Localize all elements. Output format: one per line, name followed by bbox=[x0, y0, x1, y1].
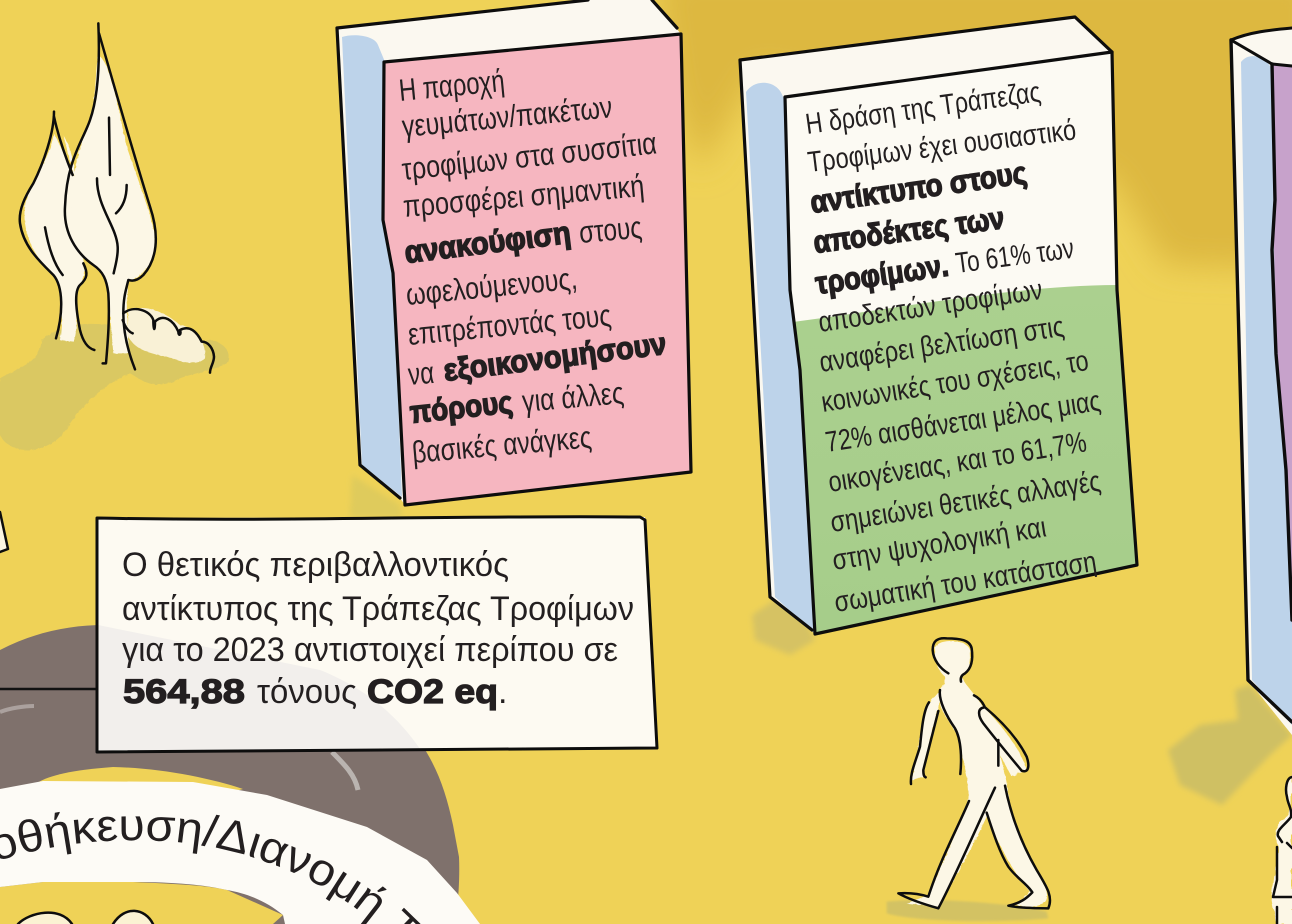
text: impact on recipients bbox=[804, 76, 1103, 619]
illustration: walking person bbox=[887, 638, 1050, 921]
text: impact on recipients: κοινωνικές του σχέσεις, το bbox=[819, 345, 1091, 419]
callout text: . bbox=[498, 673, 507, 711]
text: relief for beneficiaries: στους bbox=[578, 210, 643, 250]
text: impact on recipients: οικογένειας, και το 61,7% bbox=[826, 426, 1089, 499]
text: relief for beneficiaries: βασικές ανάγκες bbox=[411, 419, 593, 470]
icon tops below ring bbox=[18, 911, 153, 924]
text: relief for beneficiaries: ανακούφιση bbox=[403, 215, 573, 270]
text: relief for beneficiaries: γευμάτων/πακέτων bbox=[400, 89, 614, 144]
text: relief for beneficiaries: επιτρέποντάς τους bbox=[406, 298, 613, 352]
callout text: τόνους bbox=[257, 673, 357, 711]
panel: book with purple cover, cropped at right edge bbox=[1168, 28, 1292, 805]
text: impact on recipients: αποδεκτών τροφίμων bbox=[816, 274, 1045, 339]
text: impact on recipients: Τροφίμων έχει ουσιαστικό bbox=[806, 114, 1078, 179]
panel: book with pink cover, relief for beneficiaries bbox=[337, 0, 691, 517]
text: relief for beneficiaries: να bbox=[407, 355, 436, 392]
text: relief for beneficiaries bbox=[397, 63, 668, 470]
text: relief for beneficiaries: πόρους bbox=[408, 384, 514, 430]
text: relief for beneficiaries: τροφίμων στα συσσίτια bbox=[400, 125, 658, 187]
illustration: partial shape at left edge bbox=[0, 512, 8, 552]
callout text: Ο θετικός περιβαλλοντικός bbox=[122, 546, 509, 584]
text: relief for beneficiaries: ωφελούμενους, bbox=[404, 261, 579, 312]
text: impact on recipients: Το 61% των bbox=[954, 233, 1076, 280]
text: impact on recipients: Η δράση της Τράπεζας bbox=[804, 76, 1043, 141]
text: impact on recipients: στην ψυχολογική και bbox=[830, 512, 1048, 577]
callout text: 564,88 bbox=[123, 673, 245, 711]
callout text: CO2 eq bbox=[367, 673, 498, 711]
text: impact on recipients: σωματική του κατάσταση bbox=[832, 546, 1099, 619]
callout text bbox=[122, 546, 634, 711]
text: relief for beneficiaries: Η παροχή bbox=[397, 63, 506, 108]
text: relief for beneficiaries: προσφέρει σημαντική bbox=[402, 168, 646, 224]
callout text: αντίκτυπος της Τράπεζας Τροφίμων bbox=[122, 590, 634, 628]
text: impact on recipients: τροφίμων. bbox=[813, 248, 951, 301]
text: impact on recipients: αντίκτυπο στους bbox=[808, 155, 1029, 220]
text: impact on recipients: αποδέκτες των bbox=[811, 200, 1006, 260]
text: impact on recipients: αναφέρει βελτίωση στις bbox=[817, 311, 1066, 379]
text: relief for beneficiaries: εξοικονομήσουν bbox=[442, 326, 668, 388]
illustration: grey circle with ring label bbox=[0, 625, 480, 924]
ring band bbox=[0, 781, 480, 924]
text: relief for beneficiaries: για άλλες bbox=[521, 375, 625, 419]
illustration: trees and bush bbox=[0, 23, 229, 450]
callout: environmental impact bbox=[97, 517, 657, 752]
panel: book with white and green cover, impact on recipients bbox=[740, 17, 1137, 655]
text: impact on recipients: 72% αισθάνεται μέλος μιας bbox=[823, 385, 1103, 459]
text: impact on recipients: σημειώνει θετικές αλλαγές bbox=[828, 466, 1103, 539]
callout text: για το 2023 αντιστοιχεί περίπου σε bbox=[122, 631, 618, 669]
illustration: person cropped at right edge bbox=[1272, 775, 1292, 924]
